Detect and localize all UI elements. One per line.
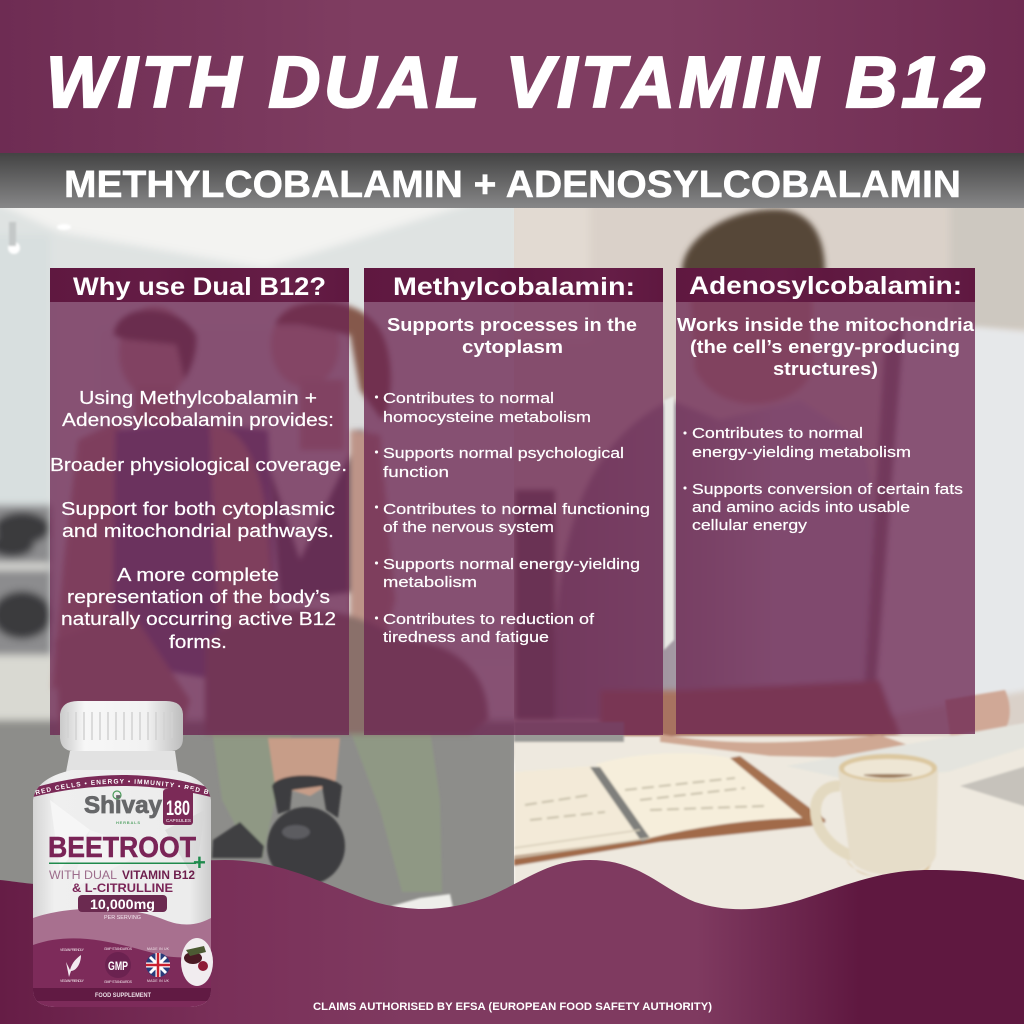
bullet list	[375, 390, 650, 646]
bullet list: Contributes to normal	[383, 390, 554, 407]
panel: adenosylcobalamin	[676, 268, 975, 734]
panel text: Adenosylcobalamin provides:	[62, 410, 334, 430]
bullet list: Contributes to reduction of	[383, 611, 595, 628]
bottle cap	[60, 701, 183, 772]
panel subheading: structures)	[773, 359, 878, 379]
product bottle	[33, 701, 213, 1007]
panel subheading: Works inside the mitochondria	[677, 315, 975, 335]
header banner	[0, 0, 1024, 153]
panel text: Support for both cytoplasmic	[61, 499, 335, 519]
panel heading	[364, 268, 663, 302]
panel text: A more complete	[117, 565, 279, 585]
panel heading	[50, 268, 349, 302]
gym photo background	[0, 200, 520, 920]
dosage pill: PER SERVING	[104, 915, 141, 921]
panel subheading	[677, 315, 975, 379]
panel text: Broader physiological coverage.	[50, 455, 347, 475]
panel heading: Why use Dual B12?	[73, 273, 326, 301]
footer note: CLAIMS AUTHORISED BY EFSA (EUROPEAN FOOD SAFETY AUTHORITY)	[313, 1001, 712, 1013]
badge: union flag: MADE IN UK	[147, 979, 170, 983]
office photo background	[505, 200, 1024, 920]
product name: VITAMIN B12	[122, 870, 195, 882]
bullet list: Supports normal psychological	[383, 445, 624, 462]
product name: +	[193, 850, 206, 875]
olive leggings below panels	[214, 736, 290, 858]
dosage pill: 10,000mg	[90, 897, 155, 912]
bullet list: function	[383, 464, 449, 481]
panel text: Using Methylcobalamin +	[79, 388, 317, 408]
subtitle band	[0, 153, 1024, 208]
notebook	[514, 812, 826, 866]
bullet list: cellular energy	[692, 517, 808, 534]
dosage pill	[78, 895, 167, 921]
product name: BEETROOT	[48, 832, 196, 864]
badge: vegan: VEGAN FRIENDLY	[60, 979, 85, 983]
180 capsules badge	[163, 789, 193, 825]
label band text	[36, 784, 210, 795]
bullet list: of the nervous system	[383, 519, 554, 536]
bullet list: Contributes to normal functioning	[383, 501, 650, 518]
supplement label: FOOD SUPPLEMENT	[95, 993, 151, 999]
bullet list: Supports conversion of certain fats	[692, 481, 963, 498]
bullet list: homocysteine metabolism	[383, 409, 591, 426]
bullet list: Supports normal energy-yielding	[383, 556, 640, 573]
product bottle: RED CELLS • ENERGY • IMMUNITY • RED BL	[35, 779, 208, 795]
badge: gmp: GMP STANDARDS	[104, 947, 133, 951]
panel text: forms.	[169, 632, 227, 652]
bullet list: metabolism	[383, 574, 477, 591]
panel text: naturally occurring active B12	[61, 609, 336, 629]
panel heading	[676, 268, 975, 302]
bullet list: and amino acids into usable	[692, 499, 910, 516]
180 capsules badge: CAPSULES	[166, 818, 191, 823]
badge: gmp: GMP STANDARDS	[104, 980, 133, 984]
gym people under panels	[52, 302, 488, 734]
badge: union flag	[146, 947, 170, 983]
product name	[48, 832, 206, 895]
product name: & L-CITRULLINE	[72, 883, 173, 895]
panel text: and mitochondrial pathways.	[62, 521, 334, 541]
bullet list: tiredness and fatigue	[383, 629, 549, 646]
180 capsules badge: 180	[166, 797, 190, 820]
panel subheading: Supports processes in the	[387, 315, 637, 335]
bullet list: Contributes to normal	[692, 425, 863, 442]
product name: WITH DUAL	[49, 870, 118, 882]
bullet list	[684, 425, 963, 534]
badge: gmp: GMP	[108, 959, 128, 973]
bottom wave	[0, 860, 1024, 1024]
brand logo: HERBALS	[116, 820, 140, 825]
badge: union flag: MADE IN UK	[147, 947, 170, 951]
subtitle: METHYLCOBALAMIN + ADENOSYLCOBALAMIN	[64, 164, 961, 206]
coffee mug	[815, 754, 938, 878]
badge: vegan	[60, 948, 85, 983]
panel: why use dual b12	[50, 268, 349, 735]
panel heading: Methylcobalamin:	[393, 273, 635, 301]
beetroot image	[181, 938, 213, 986]
panel text: representation of the body’s	[67, 587, 330, 607]
panel heading: Adenosylcobalamin:	[689, 272, 962, 300]
badge: vegan: VEGAN FRIENDLY	[60, 948, 85, 952]
panel: methylcobalamin	[364, 268, 663, 735]
brand logo: Shivay	[84, 792, 163, 819]
panel subheading: (the cell’s energy-producing	[690, 337, 960, 357]
panel text	[50, 388, 347, 652]
panel subheading	[387, 315, 637, 357]
title: WITH DUAL VITAMIN B12	[46, 43, 985, 123]
bullet list: energy-yielding metabolism	[692, 444, 911, 461]
bottle body	[33, 765, 211, 1010]
panel subheading: cytoplasm	[462, 337, 563, 357]
badge: gmp	[104, 947, 133, 984]
